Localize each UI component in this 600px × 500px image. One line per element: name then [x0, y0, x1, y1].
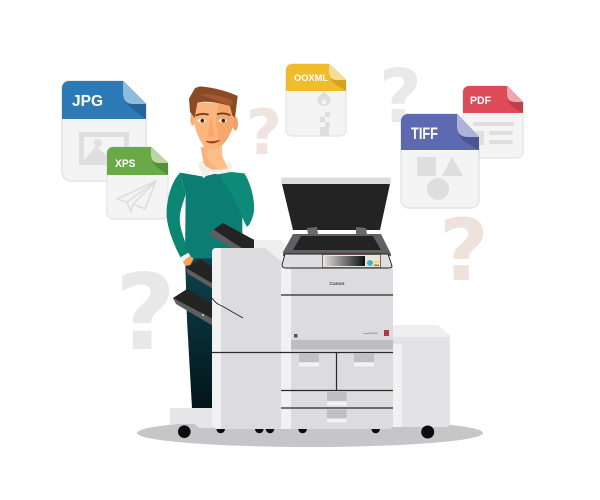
image glyph [79, 132, 129, 165]
series logo: imageRUNNER [363, 333, 378, 335]
label: TIFF: TIFF [411, 125, 438, 143]
hand [207, 144, 228, 172]
series logo [363, 330, 389, 336]
right side paper unit [390, 325, 450, 427]
finisher trays [173, 223, 254, 327]
finisher unit [212, 240, 288, 429]
file icon: JPG [62, 81, 146, 181]
question mark: beige near head: ? [246, 96, 282, 169]
face shadow [216, 104, 233, 149]
eyes [196, 113, 230, 122]
left sleeve [167, 173, 189, 258]
document lines glyph [473, 122, 514, 145]
zip glyph [317, 91, 331, 136]
scanner bed [283, 234, 391, 256]
label: XPS: XPS [115, 158, 136, 170]
question mark: left grey: ? [115, 252, 176, 374]
right sleeve [222, 171, 254, 227]
brand: Canon: Canon [330, 281, 345, 287]
trousers [185, 255, 213, 408]
sweater body [180, 172, 242, 258]
label: JPG: JPG [72, 93, 103, 110]
head [189, 86, 238, 178]
hair [189, 86, 238, 118]
output slot line [212, 298, 243, 318]
file icon: XPS [107, 147, 168, 219]
label: PDF: PDF [470, 95, 491, 107]
left step [170, 408, 216, 428]
face [193, 102, 233, 151]
torso and arms [167, 171, 254, 266]
control panel [282, 254, 392, 268]
paper plane glyph [117, 181, 156, 212]
neck [201, 145, 223, 173]
drawer handles [299, 353, 374, 422]
grey band [291, 340, 393, 350]
cuff and hand [180, 253, 194, 266]
panel lines [212, 295, 393, 408]
collar front [209, 168, 231, 174]
printer main body [212, 265, 393, 429]
ears [190, 113, 195, 126]
middle tray [186, 259, 215, 290]
touch panel [322, 254, 380, 268]
screen [325, 256, 365, 266]
wheels [178, 425, 434, 438]
top tray [209, 223, 254, 248]
bottom tray [173, 289, 215, 327]
file icon: PDF [463, 86, 523, 158]
nose [207, 115, 215, 137]
question mark: right beige: ? [439, 201, 489, 301]
question mark: top grey: ? [379, 54, 422, 140]
file icon: TIFF [401, 114, 479, 208]
buttons [367, 260, 379, 266]
label: OOXML: OOXML [294, 73, 328, 84]
person [167, 86, 254, 408]
scanner lid [281, 178, 391, 235]
file icon: OOXML [286, 64, 346, 136]
mouth [206, 140, 220, 143]
collar [198, 161, 233, 178]
power button [294, 334, 298, 338]
floor shadow [137, 419, 483, 447]
shapes glyph [417, 157, 463, 200]
